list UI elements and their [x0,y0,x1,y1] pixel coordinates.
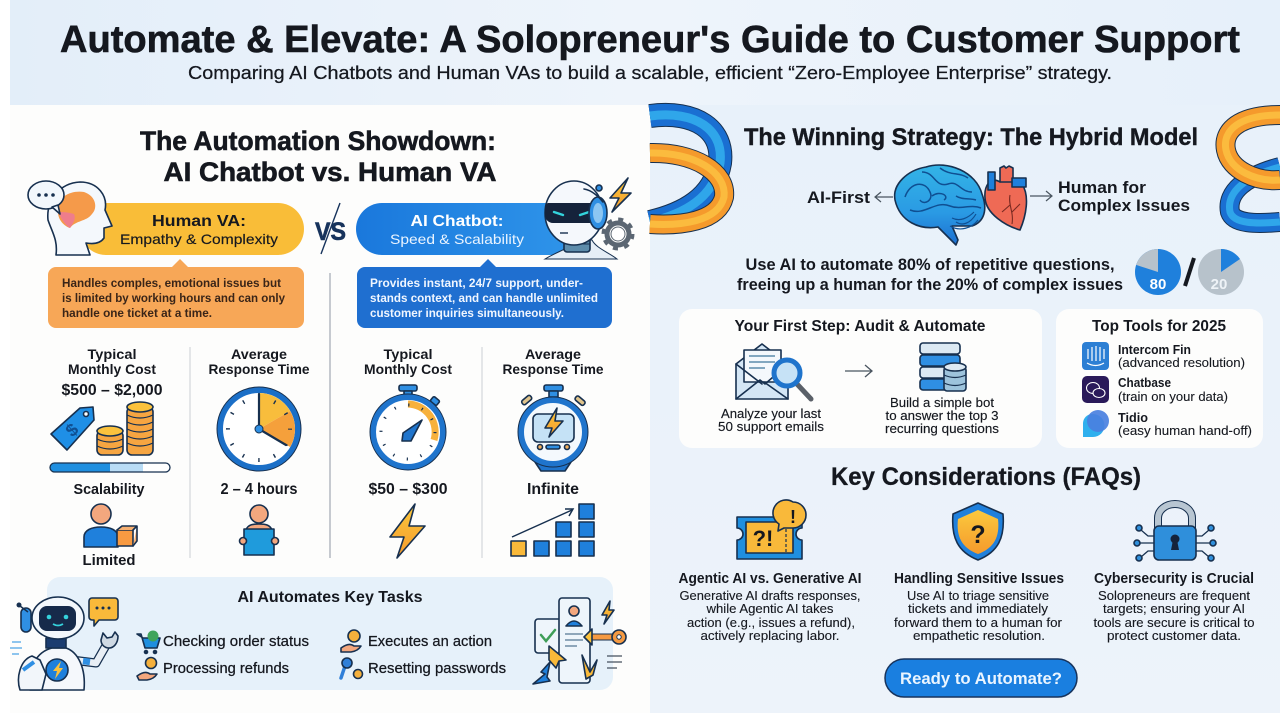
text: analyze emails: 50 support emails [718,419,825,434]
icon: clock [217,387,301,471]
callout: AI chatbot description: customer inquiries simultaneously. [370,306,564,320]
value: 2 to 4 hours: 2 – 4 hours [220,481,298,498]
title: Automate & Elevate: A Solopreneur's Guide to Customer Support [60,19,1240,61]
icon: envelope with magnifier [736,344,811,399]
tool: Tidio [1083,410,1252,438]
AI chatbot banner: Speed & Scalability [390,231,524,247]
stat: AI monthly cost: Typical [384,346,432,362]
AI chatbot banner: AI Chatbot: [410,213,504,230]
FAQ: sensitive issues [894,571,1064,643]
task: resetting passwords: Resetting passwords [368,661,506,677]
task: executes an action: Executes an action [368,634,492,650]
FAQ: cybersecurity: targets; ensuring your AI [1103,602,1245,616]
task: resetting passwords [341,658,506,678]
stat: AI monthly cost [364,346,452,377]
icon: checklist and key workflow [533,598,626,684]
stat: human scalability [74,482,144,569]
icon: AI robot head [545,181,617,259]
stat: human monthly cost: $500 – $2,000 [62,382,162,399]
icon: scaling blocks chart [511,504,594,556]
callout: human VA description: handle one ticket at a time. [62,306,212,320]
VS mark: VS [315,218,346,246]
icon: right ribbon rings [1225,115,1280,223]
section: key considerations [678,463,1255,643]
icon: person with box [84,504,137,547]
FAQ: sensitive issues: Handling Sensitive Issues [894,571,1064,587]
icon: price tag: $ [62,419,82,441]
human VA banner: Human VA: [152,213,246,230]
task: executes an action [341,630,492,652]
tool: Intercom Fin: Intercom Fin [1118,342,1191,357]
stat: human monthly cost: Monthly Cost [68,361,156,377]
FAQ: sensitive issues: forward them to a human for [894,616,1062,630]
subtitle: Comparing AI Chatbots and Human VAs to build a scalable, efficient “Zero-Employee Enterprise” strategy. [188,63,1112,83]
callout: AI chatbot description [357,259,612,328]
icon: gear [604,220,632,248]
stat: human monthly cost [62,346,162,399]
slash divider [1185,258,1194,286]
showdown heading: The Automation Showdown: [140,126,496,156]
FAQ: agentic vs generative [678,571,862,643]
FAQ: agentic vs generative: action (e.g., issues a refund), [687,616,855,630]
icon: ticket with alert [737,500,806,559]
arrow: audit to build [845,365,872,377]
first step heading: Your First Step: Audit & Automate [734,318,986,335]
task: processing refunds [137,658,289,680]
label: AI first: AI-First [807,188,870,207]
tool: Tidio: (easy human hand-off) [1118,423,1252,438]
text: build a bot: Build a simple bot [890,395,994,410]
stat: AI response time: Response Time [502,361,604,377]
text: build a bot [885,395,1000,436]
FAQ: cybersecurity: tools are secure is critical to [1094,616,1255,630]
icon: shield with question [953,503,1003,560]
task: processing refunds: Processing refunds [163,661,289,677]
callout: AI chatbot description: Provides instant, 24/7 support, under- [370,276,583,290]
arrow: to AI first [875,192,893,202]
text: build a bot: to answer the top 3 [886,408,998,423]
label: human for complex issues [1058,178,1190,215]
text: build a bot: recurring questions [885,421,1000,436]
stat: AI monthly cost: Monthly Cost [364,361,452,377]
callout: AI chatbot description: stands context, and can handle unlimited [370,291,598,305]
FAQ: sensitive issues: empathetic resolution. [913,629,1045,643]
stat: AI response time: Average [525,346,581,362]
chart: 80 percent pie [1135,249,1181,295]
icon: shield with question: ? [970,521,986,549]
tool: Intercom Fin [1082,342,1245,370]
stat: human response time: Average [231,346,287,362]
stat: human monthly cost: Typical [88,346,136,362]
icon: ticket with alert: ?! [753,526,773,551]
stat: human scalability: Limited [82,552,136,569]
icon: padlock with circuits [1134,504,1216,561]
hybrid heading: The Winning Strategy: The Hybrid Model [744,124,1198,151]
icon: left ribbon rings [650,115,724,224]
chart: 20 percent pie: 20 [1211,276,1227,293]
text: 80/20 statement: Use AI to automate 80% of repetitive questions, [746,256,1114,274]
VS mark [315,203,346,254]
FAQ: agentic vs generative: Generative AI drafts responses, [680,589,860,603]
FAQ: agentic vs generative: while Agentic AI takes [705,602,834,616]
icon: digital stopwatch [518,385,588,471]
FAQ: sensitive issues: Use AI to triage sensitive [907,589,1049,603]
stat: human response time: Response Time [208,361,310,377]
human VA banner: Empathy & Complexity [120,231,278,247]
text: 80/20 statement: freeing up a human for the 20% of complex issues [737,276,1123,294]
icon: lightning bolt top [610,178,631,212]
panel: top tools [1056,309,1263,448]
value: infinite: Infinite [527,481,579,498]
human VA banner [80,203,304,255]
icon: server and database [920,343,966,391]
FAQ: sensitive issues: tickets and immediately [908,602,1049,616]
value: 50 to 300 dollars: $50 – $300 [368,481,448,498]
stat: human scalability: Scalability [74,482,144,498]
stat: human response time [208,346,310,377]
icon: brain [895,165,985,245]
button: ready to automate [885,659,1077,697]
text: analyze emails: Analyze your last [721,406,821,421]
FAQ: agentic vs generative: actively replacing labor. [700,629,840,643]
FAQ: cybersecurity [1094,571,1255,643]
label: human for complex issues: Complex Issues [1058,196,1190,215]
FAQ heading: Key Considerations (FAQs) [831,463,1141,491]
callout: human VA description: Handles comples, emotional issues but [62,276,281,290]
showdown heading [140,126,496,187]
chart: 20 percent pie [1198,249,1244,295]
AI chatbot banner [356,203,580,255]
panel: AI automates key tasks [47,577,613,690]
task: checking order status: Checking order status [163,634,309,650]
text: analyze emails [718,406,825,434]
progress bar [50,463,170,472]
FAQ: agentic vs generative: Agentic AI vs. Generative AI [678,571,862,587]
tool: Tidio: Tidio [1118,410,1148,425]
chart: 80 percent pie: 80 [1150,276,1166,293]
icon: robot speech bubble [89,598,118,626]
showdown heading: AI Chatbot vs. Human VA [164,157,496,187]
panel: automation showdown [28,126,632,569]
button: ready to automate: Ready to Automate? [900,670,1062,688]
icon: ticket with alert: ! [790,507,796,527]
tool: Chatbase: Chatbase [1118,375,1171,390]
callout: human VA description [48,259,304,328]
icon: waving robot [10,597,118,690]
FAQ: cybersecurity: protect customer data. [1107,629,1241,643]
label: human for complex issues: Human for [1058,178,1146,197]
text: 80/20 statement [737,256,1123,294]
icon: human head with brain [28,181,112,255]
tool: Chatbase [1082,375,1228,404]
icon: stopwatch with gauge [370,385,446,470]
icon: coin stacks [97,402,153,455]
task: checking order status [137,630,309,654]
icon: heart [985,166,1026,230]
panel: first step [679,309,1042,448]
icon: price tag [51,407,94,450]
FAQ: cybersecurity: Cybersecurity is Crucial [1094,571,1254,587]
stat: AI response time [502,346,604,377]
tool: Intercom Fin: (advanced resolution) [1118,355,1245,370]
FAQ: cybersecurity: Solopreneurs are frequent [1098,589,1251,603]
tools heading: Top Tools for 2025 [1092,318,1226,335]
tool: Chatbase: (train on your data) [1118,389,1228,404]
header [60,19,1240,83]
icon: person with book [240,505,278,555]
callout: human VA description: is limited by working hours and can only [62,291,285,305]
panel: hybrid strategy [737,124,1244,295]
arrow: to human [1030,191,1052,201]
icon: lightning bolt [390,504,425,558]
tasks heading: AI Automates Key Tasks [238,589,423,606]
